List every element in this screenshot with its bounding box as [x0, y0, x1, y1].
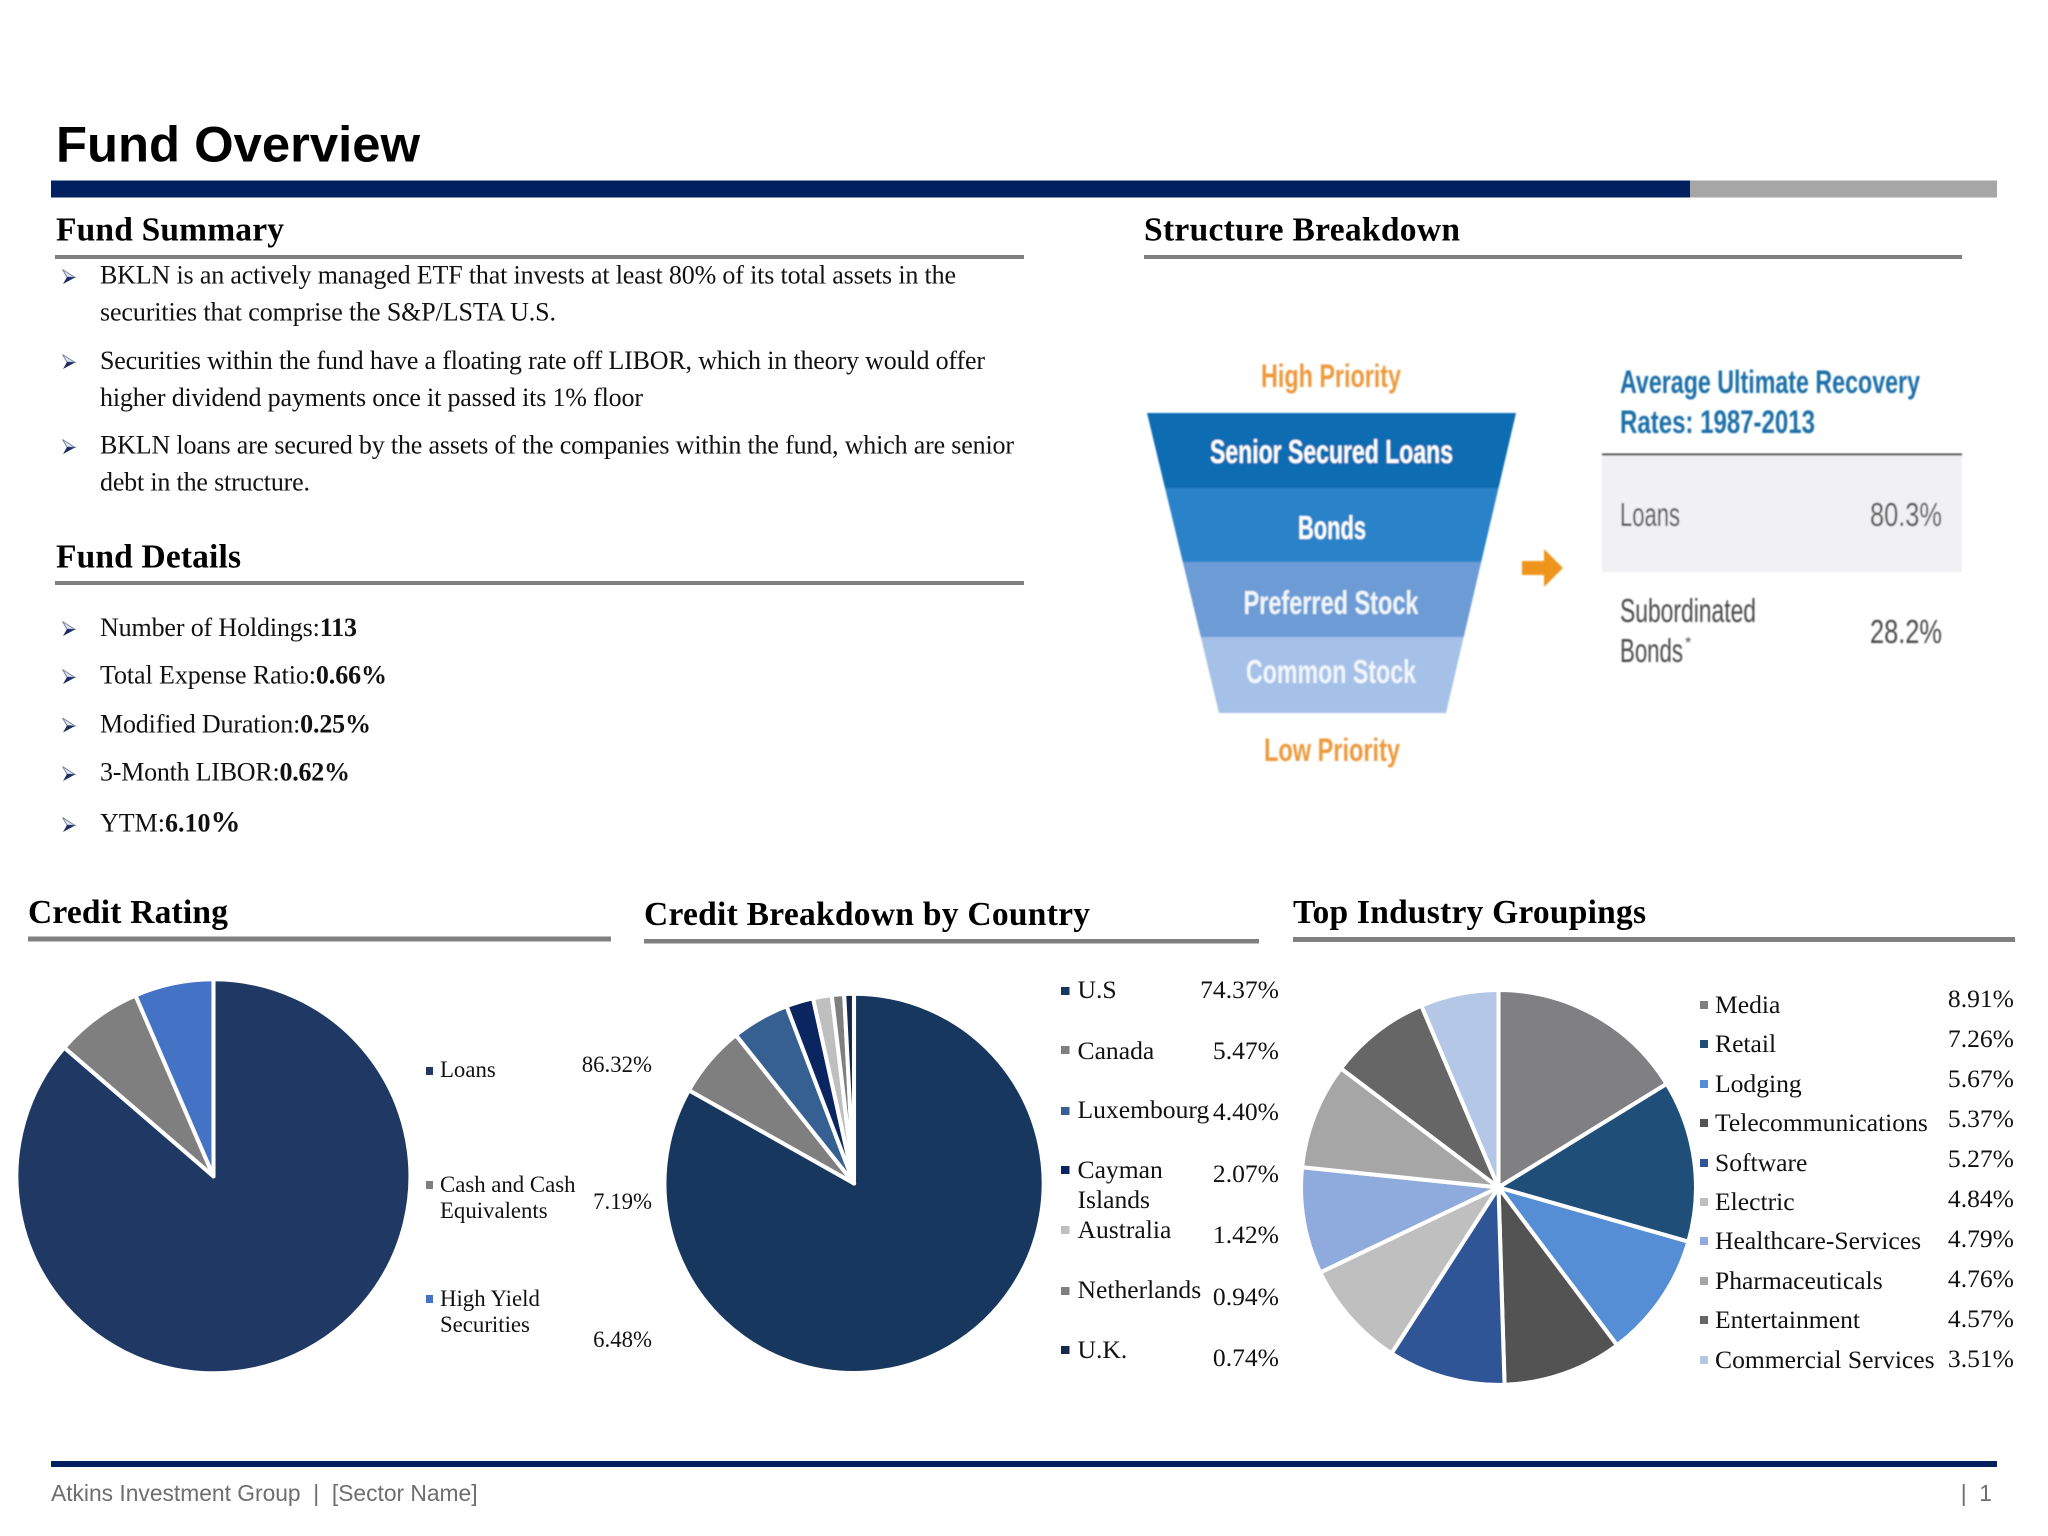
pie chart: credit rating	[16, 979, 410, 1373]
legend: country: 74.37%	[1200, 975, 1279, 1004]
legend: country: Netherlands	[1078, 1275, 1201, 1304]
table: recovery rates: Average Ultimate Recovery	[1620, 364, 1920, 400]
heading: top industry groupings	[1293, 894, 2015, 942]
legend: industry: 5.27%	[1948, 1144, 2014, 1173]
legend: country: Canada	[1078, 1036, 1155, 1065]
table: recovery rates: Loans	[1620, 496, 1680, 533]
legend: credit rating: Securities	[440, 1312, 530, 1337]
heading: credit breakdown by country	[644, 896, 1259, 944]
list: fund details: Total Expense Ratio:0.66%	[100, 660, 387, 690]
bullet list: fund summary: Securities within the fund have a floating rate off LIBOR, which in theory would offer	[100, 346, 985, 375]
legend: industry: 3.51%	[1948, 1344, 2014, 1373]
legend: country	[1061, 975, 1279, 1372]
list: fund details: Modified Duration:0.25%	[100, 710, 371, 738]
pie chart: industry	[1301, 990, 1696, 1385]
legend: country: 4.40%	[1213, 1097, 1279, 1126]
heading: credit rating: Credit Rating	[28, 894, 228, 931]
heading: credit rating	[28, 894, 611, 942]
heading: top industry groupings: Top Industry Groupings	[1293, 894, 1646, 931]
legend: industry: Healthcare-Services	[1715, 1226, 1921, 1255]
bullet list: fund summary	[62, 260, 1014, 497]
legend: industry: Software	[1715, 1148, 1807, 1177]
legend: industry: 7.26%	[1948, 1024, 2014, 1053]
legend: country: U.S	[1078, 975, 1117, 1004]
legend: country: Cayman	[1078, 1155, 1163, 1184]
bullet list: fund summary: higher dividend payments once it passed its 1% floor	[100, 383, 643, 412]
legend: country: 0.94%	[1213, 1282, 1279, 1311]
legend: credit rating	[426, 1052, 652, 1352]
label: low priority: Low Priority	[1264, 732, 1400, 768]
legend: industry: Telecommunications	[1715, 1108, 1928, 1137]
legend: country: 5.47%	[1213, 1036, 1279, 1065]
legend: credit rating: High Yield	[440, 1286, 540, 1311]
legend: industry: Electric	[1715, 1187, 1795, 1216]
funnel: capital structure priority: Common Stock	[1246, 653, 1416, 690]
footer: | 1	[1961, 1480, 1992, 1506]
funnel: capital structure priority: Senior Secured Loans	[1210, 433, 1453, 470]
table: recovery rates: 28.2%	[1870, 613, 1942, 650]
title: Fund Overview	[56, 116, 421, 173]
legend: country: 0.74%	[1213, 1343, 1279, 1372]
table: recovery rates: Bonds	[1620, 632, 1683, 669]
table: recovery rates: 80.3%	[1870, 496, 1942, 533]
legend: credit rating: 7.19%	[593, 1189, 652, 1214]
title bar	[51, 180, 1997, 198]
legend: industry: Commercial Services	[1715, 1345, 1935, 1374]
legend: industry: 4.76%	[1948, 1264, 2014, 1293]
legend: industry: Lodging	[1715, 1069, 1802, 1098]
legend: industry: Pharmaceuticals	[1715, 1266, 1883, 1295]
legend: industry: Media	[1715, 990, 1781, 1019]
table: recovery rates: Subordinated	[1620, 592, 1756, 629]
heading: fund details	[55, 538, 1024, 585]
footer: Atkins Investment Group | [Sector Name]	[51, 1480, 478, 1506]
heading: structure breakdown	[1144, 212, 1962, 259]
legend: industry: 8.91%	[1948, 984, 2014, 1013]
heading: fund details: Fund Details	[56, 538, 241, 575]
panel: structure breakdown	[1144, 212, 1962, 768]
list: fund details: YTM:6.10%	[100, 806, 240, 838]
bullet list: fund summary: securities that comprise the S&P/LSTA U.S.	[100, 297, 556, 326]
list: fund details	[62, 613, 387, 838]
legend: industry: 5.67%	[1948, 1064, 2014, 1093]
footer	[51, 1461, 1997, 1506]
legend: credit rating: Equivalents	[440, 1198, 548, 1223]
legend: industry: 5.37%	[1948, 1104, 2014, 1133]
heading: fund summary	[55, 212, 1024, 259]
funnel: capital structure priority: Preferred Stock	[1244, 584, 1419, 621]
heading: credit breakdown by country: Credit Breakdown by Country	[644, 896, 1090, 933]
heading: fund summary: Fund Summary	[56, 212, 284, 249]
legend: credit rating: 86.32%	[582, 1052, 652, 1077]
panel: fund summary	[55, 212, 1024, 497]
legend: country: Australia	[1078, 1215, 1172, 1244]
legend: country: U.K.	[1078, 1335, 1127, 1364]
table: recovery rates: *	[1685, 635, 1691, 652]
label: high priority: High Priority	[1261, 358, 1401, 394]
pie chart: country	[664, 994, 1044, 1373]
legend: country: 2.07%	[1213, 1159, 1279, 1188]
legend: credit rating: Cash and Cash	[440, 1172, 576, 1197]
legend: industry: 4.84%	[1948, 1184, 2014, 1213]
table: recovery rates	[1602, 364, 1962, 669]
funnel: capital structure priority	[1147, 413, 1516, 713]
legend: industry: 4.57%	[1948, 1304, 2014, 1333]
table: recovery rates: Rates: 1987-2013	[1620, 404, 1815, 440]
legend: industry	[1700, 984, 2014, 1374]
bullet list: fund summary: debt in the structure.	[100, 468, 310, 497]
legend: country: 1.42%	[1213, 1220, 1279, 1249]
legend: country: Islands	[1078, 1185, 1150, 1214]
bullet list: fund summary: BKLN loans are secured by the assets of the companies within the fund, which are senior	[100, 431, 1014, 460]
legend: industry: 4.79%	[1948, 1224, 2014, 1253]
legend: industry: Retail	[1715, 1029, 1776, 1058]
list: fund details: 3-Month LIBOR:0.62%	[100, 758, 350, 786]
legend: credit rating: 6.48%	[593, 1327, 652, 1352]
panel: credit rating	[16, 894, 652, 1373]
funnel: capital structure priority: Bonds	[1298, 509, 1366, 546]
legend: country: Luxembourg	[1078, 1095, 1209, 1124]
heading: structure breakdown: Structure Breakdown	[1144, 212, 1460, 249]
legend: industry: Entertainment	[1715, 1305, 1860, 1334]
panel: credit breakdown by country	[644, 896, 1279, 1373]
panel: fund details	[55, 538, 1024, 838]
bullet list: fund summary: BKLN is an actively managed ETF that invests at least 80% of its total assets in the	[100, 260, 956, 289]
arrow	[1522, 549, 1563, 587]
list: fund details: Number of Holdings:113	[100, 613, 357, 642]
panel: top industry groupings	[1293, 894, 2015, 1385]
legend: credit rating: Loans	[440, 1057, 496, 1082]
